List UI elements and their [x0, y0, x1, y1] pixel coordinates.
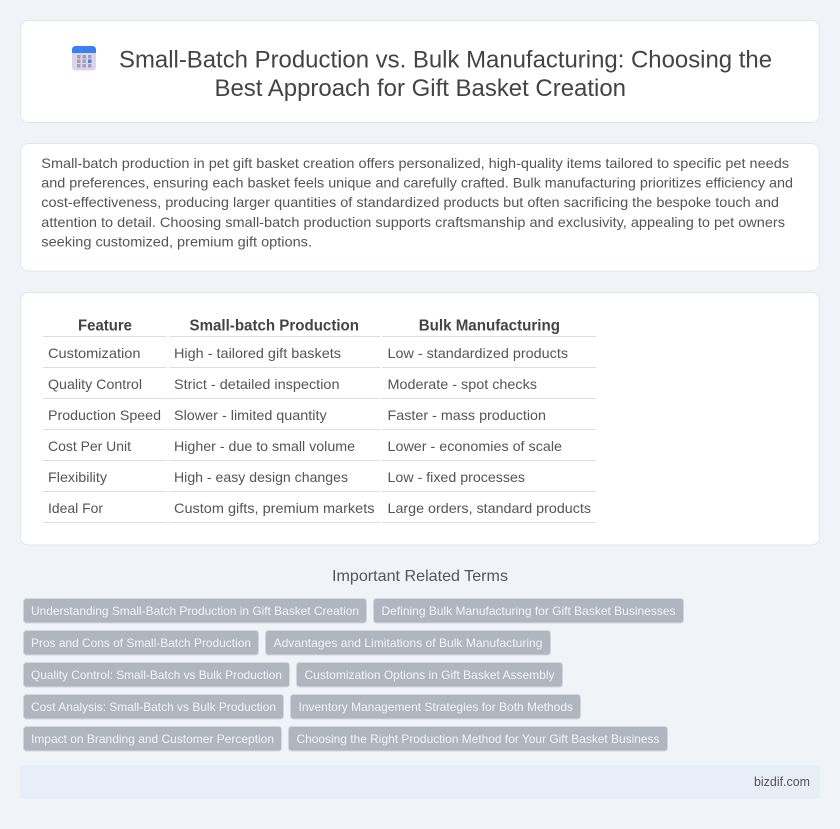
table row: cost per unit: Higher - due to small volume — [174, 438, 355, 454]
table row: cost per unit — [43, 438, 596, 460]
text block: summary: seeking customized, premium gift options. — [41, 233, 312, 249]
title: Small-Batch Production vs. Bulk Manufacturing: Choosing the — [119, 46, 772, 74]
tag: Quality Control: Small-Batch vs Bulk Production — [31, 668, 282, 682]
table row: customization — [43, 345, 596, 368]
text block: summary: cost-effectiveness, producing larger quantities of standardized products but often sacrificing the bespoke touch and — [41, 194, 779, 210]
table row: flexibility: Flexibility — [48, 469, 107, 485]
footer bar — [20, 765, 820, 799]
tag: Defining Bulk Manufacturing for Gift Basket Businesses — [382, 604, 676, 618]
table row: quality control — [43, 376, 596, 398]
table header row: Small-batch Production — [190, 318, 359, 335]
tag: Choosing the Right Production Method for Your Gift Basket Business — [296, 732, 660, 746]
table row: quality control: Quality Control — [48, 376, 142, 392]
panel: header — [20, 20, 820, 122]
tag — [24, 726, 282, 751]
table row: quality control: Moderate - spot checks — [388, 376, 537, 392]
table row: production speed — [43, 407, 596, 430]
text block: summary — [41, 155, 793, 249]
title — [119, 46, 772, 102]
table row: ideal for: Ideal For — [48, 500, 103, 516]
footer bar: bizdif.com — [754, 774, 810, 789]
tag: Pros and Cons of Small-Batch Production — [31, 636, 251, 650]
table row: customization: Customization — [48, 345, 140, 361]
table row: customization: High - tailored gift baskets — [174, 345, 341, 361]
panel: comparison table — [20, 292, 820, 545]
tag: Advantages and Limitations of Bulk Manufacturing — [274, 636, 542, 650]
tag — [24, 630, 258, 655]
text block: summary: attention to detail. Choosing small-batch production supports craftsmanship and exclusivity, appealing to pet owners — [41, 214, 785, 230]
panel: related term tags — [24, 598, 684, 751]
tag: Cost Analysis: Small-Batch vs Bulk Production — [31, 700, 276, 714]
table row: ideal for: Custom gifts, premium markets — [174, 500, 374, 516]
text block: summary: and preferences, ensuring each basket feels unique and carefully crafted. Bulk manufacturing prioritizes efficiency and — [41, 175, 793, 191]
table header row — [43, 318, 596, 336]
icon: calendar — [72, 46, 96, 70]
table row: flexibility: High - easy design changes — [174, 469, 348, 485]
tag — [266, 630, 550, 655]
tag — [24, 662, 290, 687]
tag — [296, 662, 562, 687]
tag — [290, 694, 580, 719]
table header row: Bulk Manufacturing — [419, 318, 560, 335]
table row: cost per unit: Lower - economies of scale — [388, 438, 562, 454]
tag: Inventory Management Strategies for Both Methods — [298, 700, 573, 714]
table row: customization: Low - standardized products — [388, 345, 568, 361]
text block: summary: Small-batch production in pet gift basket creation offers personalized, high-quality items tailored to specific pet needs — [41, 155, 789, 171]
title: Best Approach for Gift Basket Creation — [214, 75, 626, 102]
table row: ideal for: Large orders, standard products — [388, 500, 591, 516]
tag — [288, 726, 668, 751]
table row: production speed: Slower - limited quantity — [174, 407, 327, 423]
table row: flexibility: Low - fixed processes — [388, 469, 525, 485]
table header row: Feature — [78, 318, 132, 335]
tag: Impact on Branding and Customer Perception — [31, 732, 274, 746]
table row: production speed: Production Speed — [48, 407, 161, 423]
table row: production speed: Faster - mass production — [388, 407, 546, 423]
table row: ideal for — [43, 500, 596, 522]
table row: flexibility — [43, 469, 596, 492]
tag: Customization Options in Gift Basket Assembly — [304, 668, 554, 682]
tag — [374, 598, 684, 623]
table row: cost per unit: Cost Per Unit — [48, 438, 131, 454]
table row: quality control: Strict - detailed inspection — [174, 376, 340, 392]
panel: summary paragraph — [20, 144, 820, 271]
tag: Understanding Small-Batch Production in Gift Basket Creation — [31, 604, 359, 618]
tag — [24, 598, 366, 623]
tag — [24, 694, 284, 719]
heading: important related terms: Important Related Terms — [332, 568, 508, 585]
